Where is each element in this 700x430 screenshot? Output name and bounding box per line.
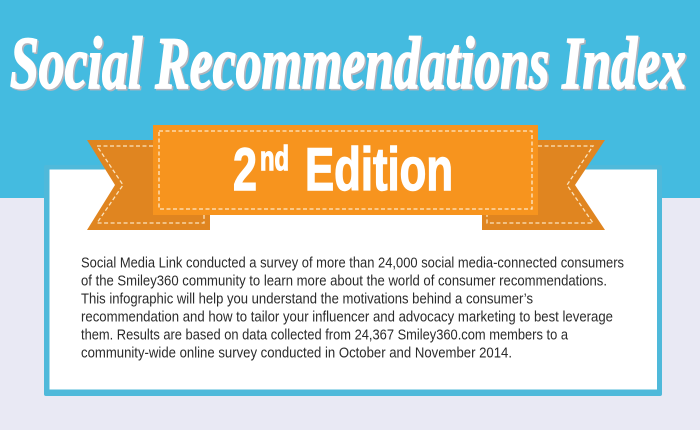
intro text block: recommendation and how to tailor your influencer and advocacy marketing to best leverage <box>81 310 613 326</box>
intro text block: them. Results are based on data collected from 24,367 Smiley360.com members to a <box>81 328 568 344</box>
blue header band <box>0 0 700 198</box>
ribbon: left tail <box>87 140 210 230</box>
intro text block: This infographic will help you understand the motivations behind a consumer’s <box>81 292 533 308</box>
intro text block <box>81 256 624 362</box>
panel: introduction card <box>44 165 662 396</box>
banner heading: 2nd Edition: nd <box>260 140 289 178</box>
intro text block: of the Smiley360 community to learn more about the world of consumer recommendations. <box>81 274 607 290</box>
ribbon: main banner <box>153 125 538 215</box>
ribbon: right tail <box>482 140 605 230</box>
intro text block: community-wide online survey conducted in October and November 2014. <box>81 346 512 362</box>
banner heading: 2nd Edition: 2 <box>233 136 257 203</box>
banner heading: 2nd Edition: Edition <box>305 136 453 203</box>
intro text block: Social Media Link conducted a survey of more than 24,000 social media-connected consumers <box>81 256 624 272</box>
banner heading: 2nd Edition <box>233 136 453 203</box>
